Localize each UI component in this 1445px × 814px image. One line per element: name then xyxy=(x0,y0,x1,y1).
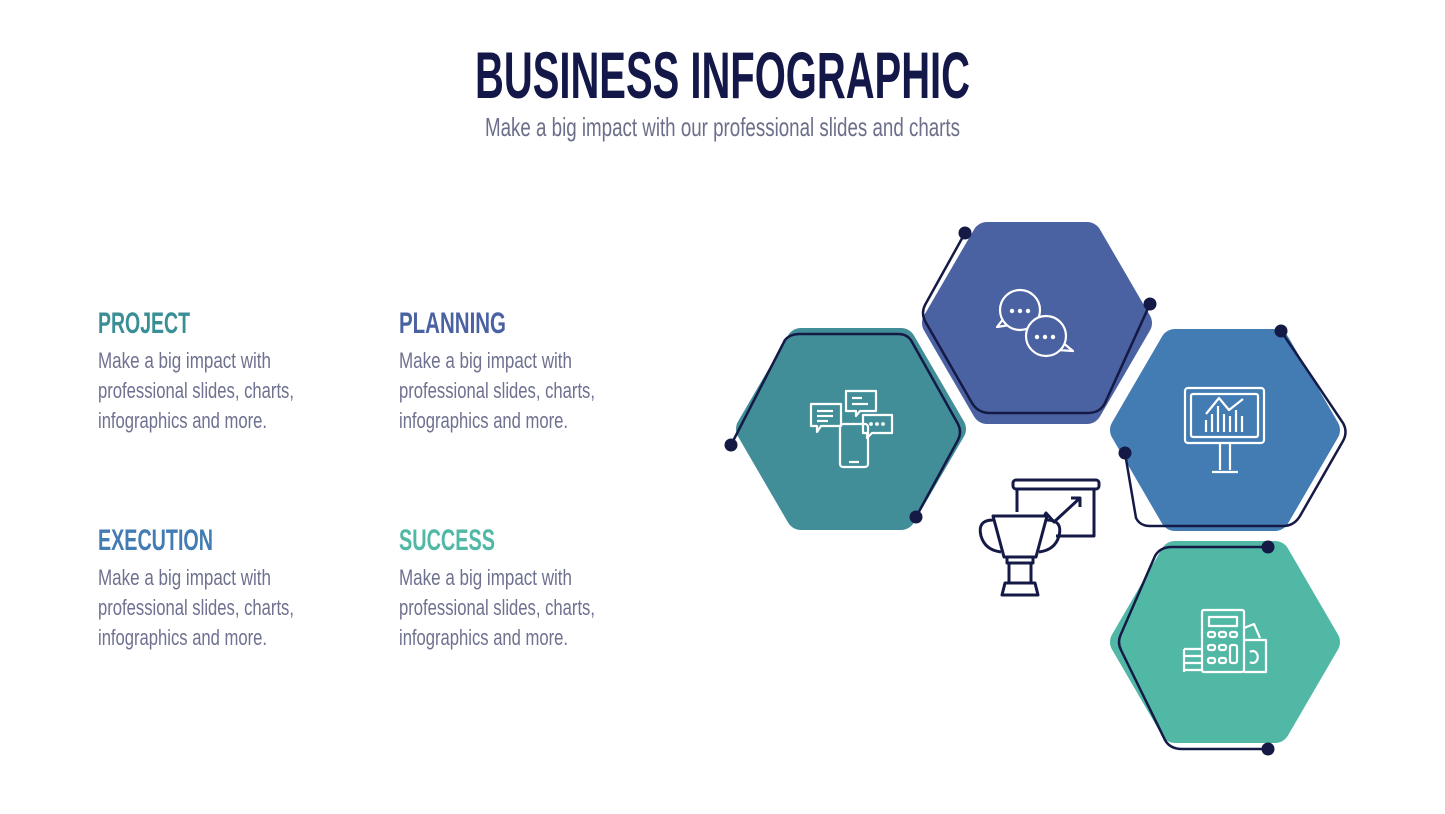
text block: success: Make a big impact with xyxy=(399,565,572,590)
text block: project: PROJECT xyxy=(98,307,190,340)
text block: execution: infographics and more. xyxy=(98,625,267,650)
text block: execution: Make a big impact with xyxy=(98,565,271,590)
text block: planning: Make a big impact with xyxy=(399,348,572,373)
title: BUSINESS INFOGRAPHIC xyxy=(475,38,970,112)
text block: project xyxy=(98,307,294,433)
hexagon: green success xyxy=(1119,540,1325,756)
text block: execution xyxy=(98,524,294,650)
text block: planning: professional slides, charts, xyxy=(399,378,595,403)
hexagon: teal project xyxy=(724,334,960,524)
text block: success: infographics and more. xyxy=(399,625,568,650)
text block: planning xyxy=(399,307,595,433)
text block: success: SUCCESS xyxy=(399,524,495,557)
text block: execution: EXECUTION xyxy=(98,524,213,557)
icon: speech bubbles xyxy=(997,290,1073,356)
icon: calculator and cash xyxy=(1184,610,1266,672)
text block: success: professional slides, charts, xyxy=(399,595,595,620)
text block: project: Make a big impact with xyxy=(98,348,271,373)
icon: trophy with presentation board xyxy=(980,480,1099,595)
hexagon: purple planning xyxy=(923,226,1156,413)
text block: project: infographics and more. xyxy=(98,408,267,433)
icon: monitor with chart xyxy=(1185,388,1264,472)
subtitle: Make a big impact with our professional slides and charts xyxy=(485,112,960,142)
text block: execution: professional slides, charts, xyxy=(98,595,294,620)
text block: success xyxy=(399,524,595,650)
text block: planning: infographics and more. xyxy=(399,408,568,433)
text block: planning: PLANNING xyxy=(399,307,506,340)
text block: project: professional slides, charts, xyxy=(98,378,294,403)
hexagon: blue execution xyxy=(1118,324,1346,526)
icon: phone with chat bubbles xyxy=(811,391,892,467)
